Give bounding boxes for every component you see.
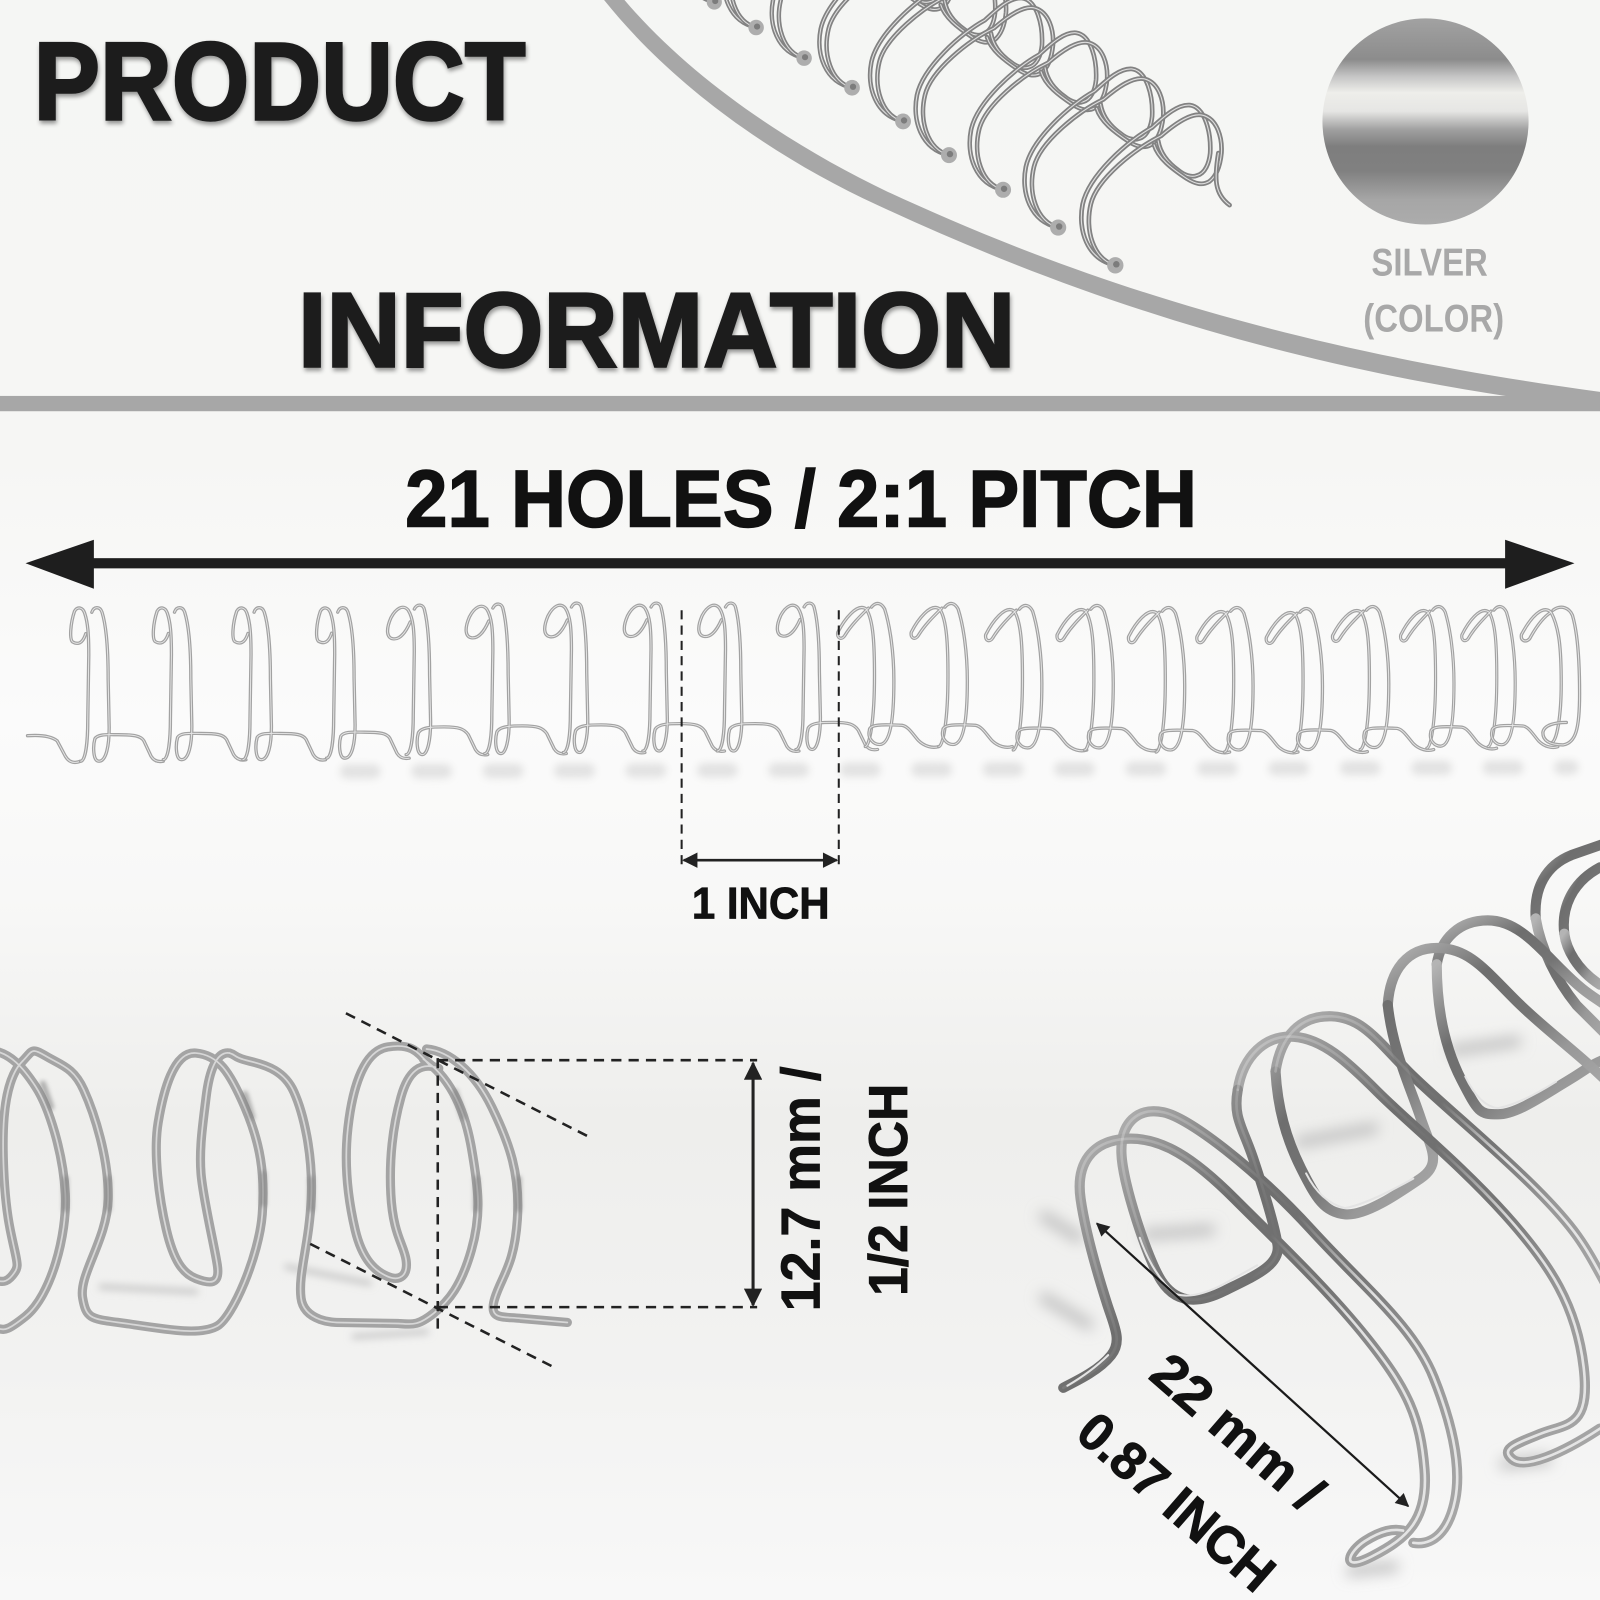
dashed guides: [682, 610, 839, 865]
photo: coil close-up, lower right: [1041, 841, 1600, 1600]
label: 12.7 mm: 12.7 mm /: [769, 1066, 831, 1311]
label: 1 INCH: [692, 877, 830, 928]
wires: [1063, 841, 1600, 1562]
photo: silver wire coil, top: [642, 0, 1230, 273]
colour label: [1363, 242, 1504, 341]
heading: 21 holes / 2:1 pitch: 21 HOLES / 2:1 PITCH: [405, 455, 1197, 545]
wires: [0, 1046, 567, 1331]
curved grey swoosh: [604, 0, 1600, 400]
length arrow: [26, 540, 1574, 589]
header rule: [0, 396, 1600, 411]
photo: full 21-loop wire binding: [28, 603, 1580, 771]
double arrow: [684, 859, 837, 861]
photo: coil close-up, lower left: [0, 1013, 919, 1366]
colour swatch: silver: [1322, 18, 1529, 224]
soft shadows: [1041, 1041, 1551, 1571]
label: 1/2 inch: 1/2 INCH: [857, 1084, 919, 1296]
label: 22 mm: 22 mm /: [1139, 1342, 1335, 1523]
diameter arrow: [1097, 1223, 1408, 1506]
title line: PRODUCT: PRODUCT: [34, 20, 526, 143]
soft shadows: [99, 1266, 429, 1337]
dimension arrow: [752, 1063, 755, 1305]
title line: INFORMATION: INFORMATION: [298, 271, 1015, 389]
dashed measuring guides: [310, 1013, 757, 1366]
colour label: (COLOR): [1363, 298, 1504, 341]
colour label: SILVER: [1371, 242, 1488, 285]
header panel: [0, 0, 1600, 411]
